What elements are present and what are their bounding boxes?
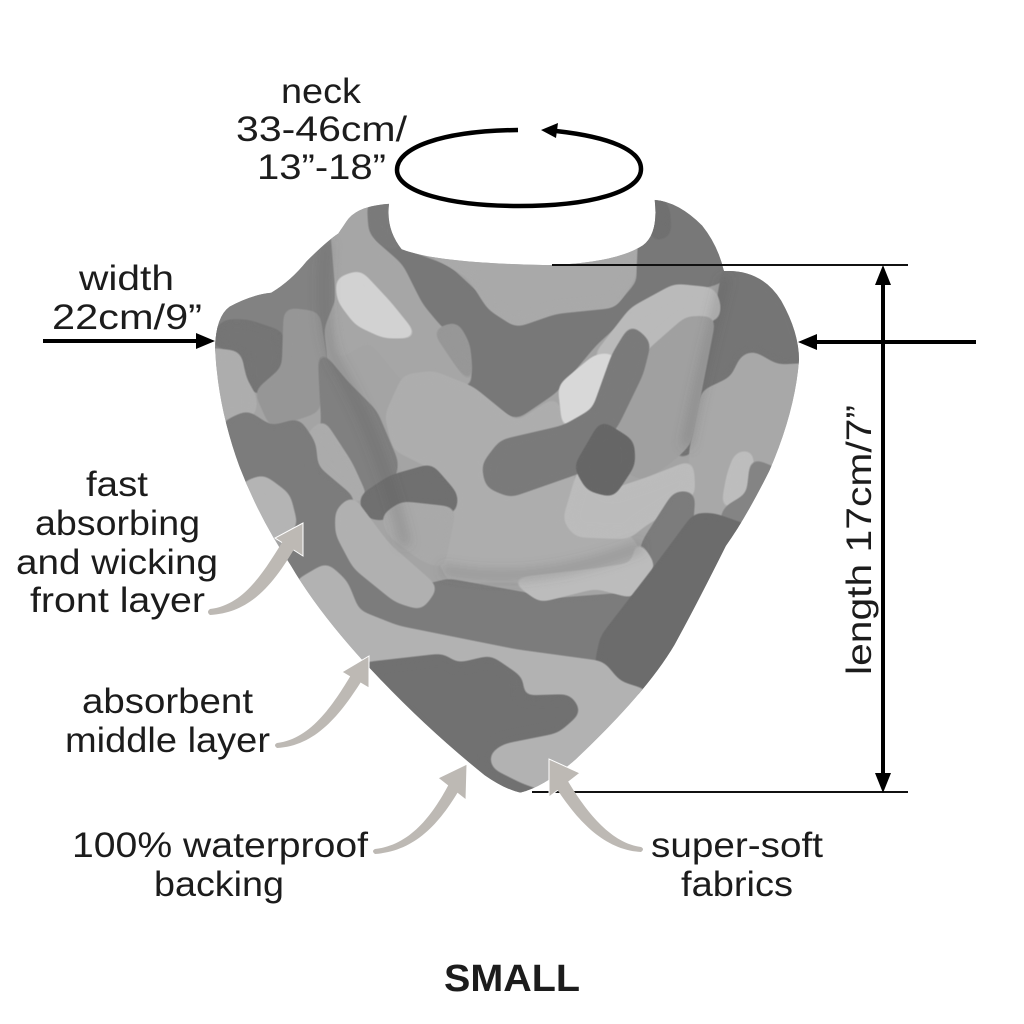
waterproof backing label: backing [154,865,284,904]
super-soft fabrics label [651,826,823,904]
lower left dark band [222,411,694,666]
right shoulder dark [680,270,799,457]
middle layer label: middle layer [65,721,270,760]
right side light panel [688,352,799,468]
left light patch near arrow [246,476,296,541]
left collar column [330,194,471,388]
width label: 22cm/9” [52,298,202,337]
front layer label: absorbing [35,504,200,543]
middle layer label [65,682,270,760]
neck reference line [552,264,908,266]
lightest top left fold [336,271,417,337]
arrow to backing [373,764,467,854]
left mid panel [255,309,327,427]
collar front light panel [430,248,638,326]
width label [52,259,202,337]
lower light band [299,565,643,792]
arrow to front layer [208,523,303,615]
width arrow right [798,334,976,350]
neck circular arrow [397,123,641,206]
dark blob centre left [360,465,457,520]
front layer label: fast [86,465,148,504]
darkest finger overlap [575,421,634,496]
arrow to fabrics [549,759,643,852]
neck title text: 13”-18” [257,148,386,187]
length vertical arrow [875,265,891,793]
left mid fold dark [318,357,398,492]
bottom reference line [532,791,908,793]
neck title text: 33-46cm/ [236,110,407,149]
front layer label [16,465,218,620]
right small light blob [722,451,753,508]
upper right light swoosh [591,285,720,360]
length label: length 17cm/7” [840,405,879,675]
neck title text: neck [281,72,362,111]
super-soft fabrics label: fabrics [681,865,793,904]
left fold light strip [336,496,437,609]
small left light blob [316,422,365,500]
upper left dark shoulder [215,229,342,357]
lower centre light blob [564,461,694,538]
bandana bib illustration [200,190,820,810]
waterproof backing label: 100% waterproof [72,826,368,865]
lightest fold patch [558,354,612,424]
centre dark V [366,190,732,419]
right dark lobe [595,514,754,696]
front layer label: front layer [30,581,205,620]
small mid blob near neck [437,324,472,376]
dark finger shape [483,325,650,496]
inner collar shadow left [367,204,399,246]
left inner dark patch [215,320,282,394]
super-soft fabrics label: super-soft [651,826,823,865]
front layer label: and wicking [16,543,218,582]
left light edge [215,348,256,419]
width arrow left [43,333,215,349]
central light blob [386,372,641,581]
neck title text [236,72,407,187]
base fabric [200,190,820,810]
size heading: SMALL [444,958,580,1000]
inner collar shadow right [651,200,670,238]
light crescent bottom centre [518,546,654,602]
waterproof backing label [72,826,368,904]
middle layer label: absorbent [82,682,253,721]
right dark triangle [721,461,772,532]
right centre fold panel [648,316,714,456]
light blob above band [382,502,453,520]
bottom tip dark patch [370,654,579,792]
arrow to middle layer [275,656,369,748]
soft fold shadows [324,284,720,582]
width label: width [78,259,174,298]
